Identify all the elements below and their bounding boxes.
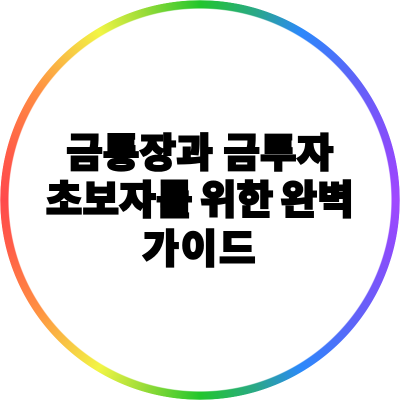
title line 2: 초보자를 위한 완벽 — [46, 179, 354, 223]
title line 1: 금통장과 금투자 — [66, 132, 334, 176]
title line 3: 가이드 — [142, 228, 258, 272]
